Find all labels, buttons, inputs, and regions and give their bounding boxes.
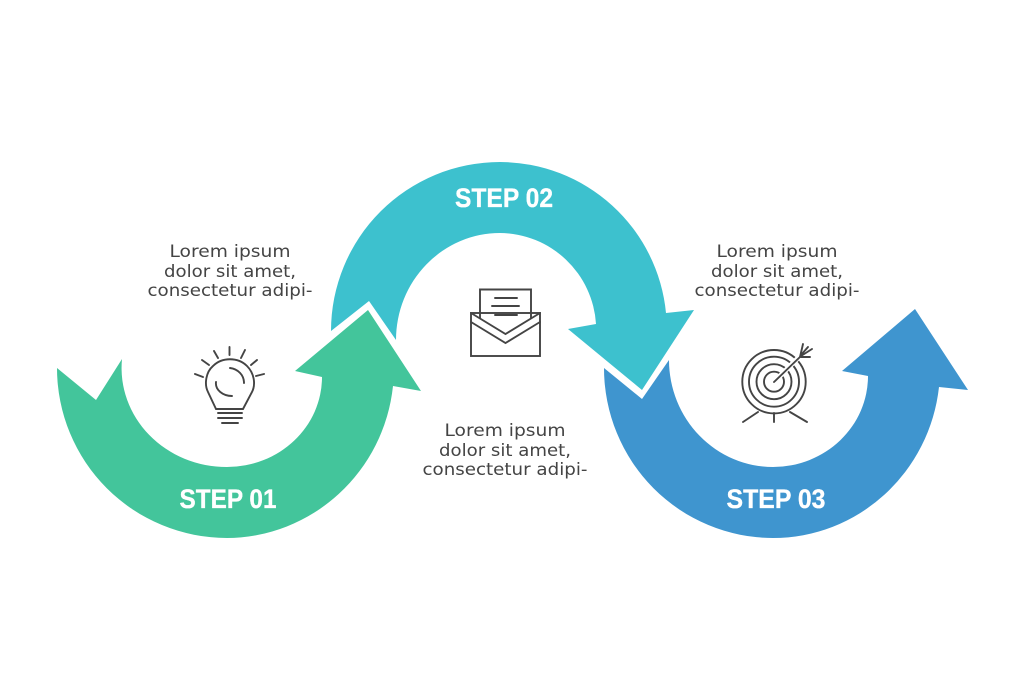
text block: step 2: Lorem ipsum [444, 421, 566, 440]
icon: envelope [471, 290, 540, 356]
text block: step 3: Lorem ipsum [716, 242, 838, 261]
heading: step 02: STEP 02 [455, 183, 553, 213]
text block: step 2 [422, 421, 588, 479]
text block: step 2: dolor sit amet, [439, 441, 571, 460]
text block: step 3: consectetur adipi- [694, 281, 860, 300]
text block: step 1: Lorem ipsum [170, 242, 290, 261]
text block: step 1: dolor sit amet, [164, 262, 296, 281]
heading: step 01: STEP 01 [180, 484, 276, 514]
step 3 arrow [604, 309, 968, 538]
icon: target [742, 344, 812, 422]
text block: step 1 [148, 242, 313, 300]
step 2 arrow [331, 162, 694, 390]
text block: step 3 [694, 242, 860, 300]
text block: step 3: dolor sit amet, [711, 262, 843, 281]
text block: step 1: consectetur adipi- [148, 281, 313, 300]
text block: step 2: consectetur adipi- [422, 460, 588, 479]
step 1 arrow [57, 310, 421, 538]
icon: light bulb [195, 347, 264, 423]
heading: step 03: STEP 03 [726, 484, 826, 514]
